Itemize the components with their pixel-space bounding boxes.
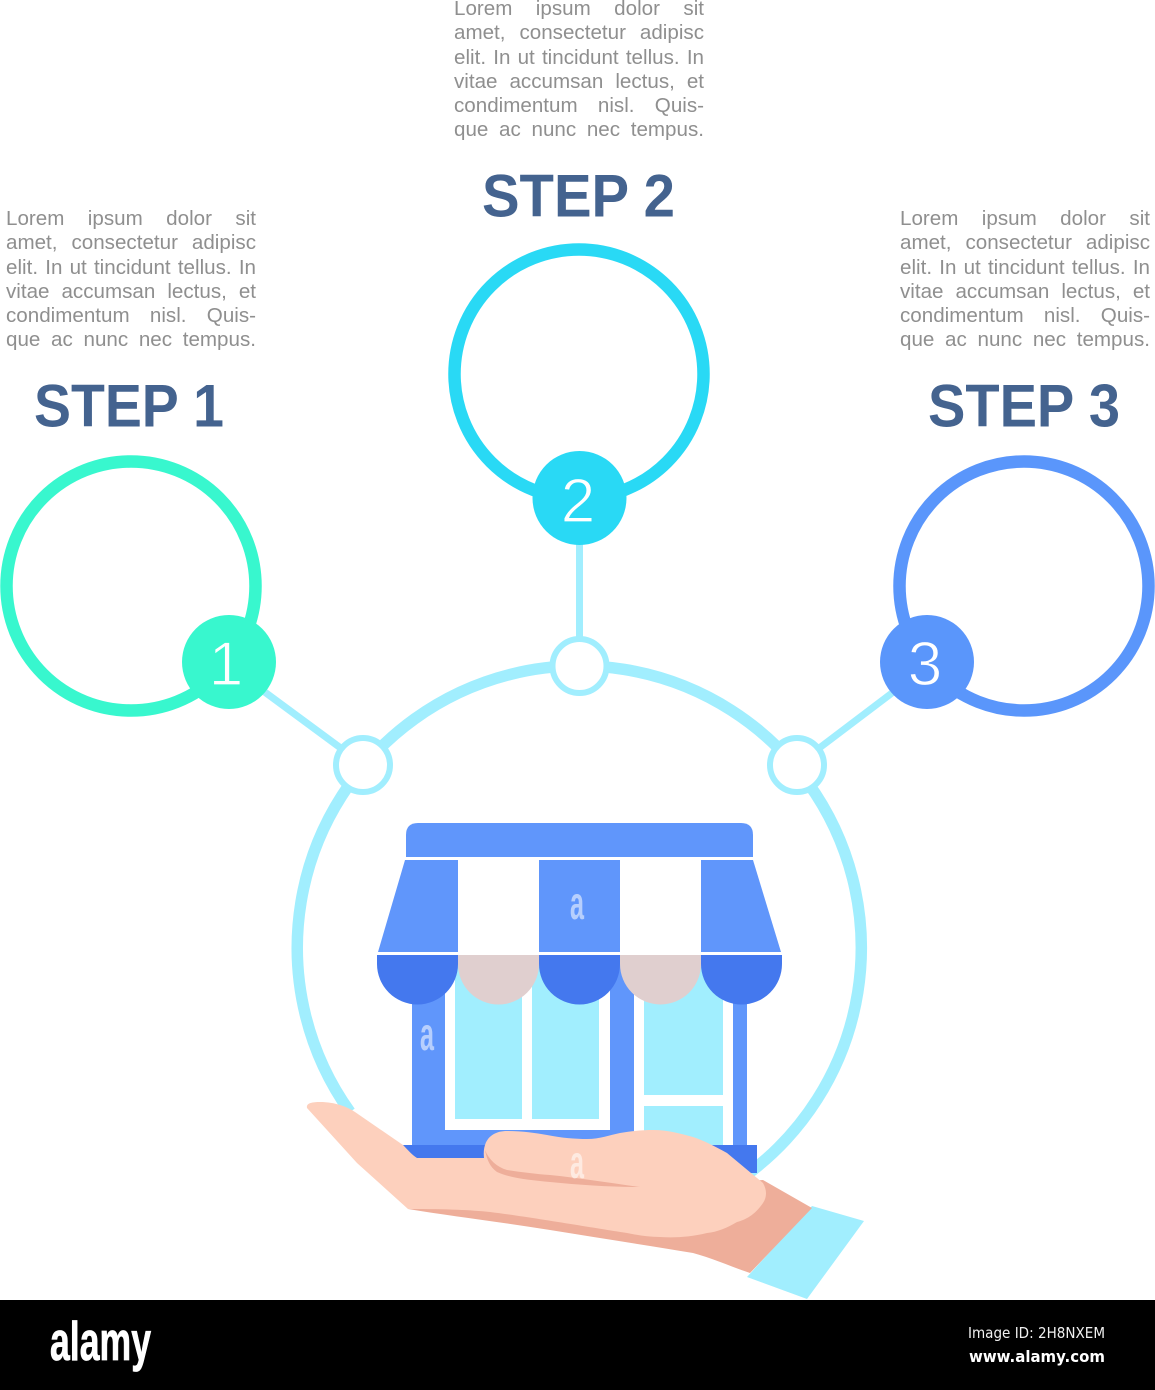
step 2 ring with badge [454, 250, 704, 545]
text block: step 1: elit. In ut tincidunt tellus. In [6, 256, 256, 278]
text block: step 3: amet, consectetur adipisc [900, 231, 1150, 254]
heading: step 1: STEP 1 [34, 372, 224, 440]
text block: step 1 [6, 207, 256, 351]
text block: step 3: Lorem ipsum dolor sit [900, 207, 1150, 230]
palm [307, 1102, 766, 1237]
text block: step 2: amet, consectetur adipisc [454, 21, 704, 44]
connector: step 2 [576, 540, 583, 640]
step 3 ring with badge [880, 462, 1148, 710]
text block: step 1: que ac nunc nec tempus. [6, 328, 256, 351]
shop window [445, 958, 610, 1130]
text block: step 3: elit. In ut tincidunt tellus. In [900, 256, 1150, 278]
step 1 ring with badge [6, 462, 276, 710]
heading: step 2: STEP 2 [482, 162, 675, 230]
awning scallops [377, 955, 782, 1004]
connector node 2 [552, 639, 606, 693]
watermark letters [420, 877, 584, 1188]
text block: step 2: que ac nunc nec tempus. [454, 118, 704, 141]
icon: hand holding the store [307, 1102, 864, 1299]
text block: step 3: que ac nunc nec tempus. [900, 328, 1150, 351]
connector node 1 [336, 738, 390, 792]
wrist and hand shadow [408, 1180, 812, 1273]
icon: storefront [377, 823, 782, 1173]
text block: step 2: vitae accumsan lectus, et [454, 70, 704, 93]
store walls [412, 958, 747, 1155]
footer logo: alamy [50, 1310, 151, 1372]
large central ring [297, 666, 861, 1176]
connector node 3 [770, 738, 824, 792]
text block: step 2: condimentum nisl. Quis- [454, 94, 704, 117]
footer image id: Image ID: 2H8NXEM [968, 1324, 1105, 1342]
step 3 ring with badge: 3 [908, 630, 942, 699]
text block: step 1: condimentum nisl. Quis- [6, 304, 256, 327]
watermark letters: a [570, 877, 584, 929]
shop door [634, 958, 733, 1156]
roof bar [406, 823, 753, 857]
text block: step 1: vitae accumsan lectus, et [6, 280, 256, 303]
sleeve cuff [747, 1206, 864, 1299]
text block: step 2 [454, 0, 704, 141]
awning stripes [378, 860, 781, 952]
store base [403, 1145, 757, 1173]
text block: step 3 [900, 207, 1150, 351]
step 2 ring with badge: 2 [561, 467, 595, 536]
footer website: www.alamy.com [969, 1347, 1105, 1366]
connector: step 1 [262, 690, 342, 749]
finger shadow [485, 1150, 640, 1187]
watermark letters: a [420, 1008, 434, 1060]
text block: step 3: vitae accumsan lectus, et [900, 280, 1150, 303]
step 1 ring with badge: 1 [209, 630, 243, 699]
connector: step 3 [818, 690, 896, 749]
watermark letters: a [570, 1136, 584, 1188]
text block: step 1: amet, consectetur adipisc [6, 231, 256, 254]
heading: step 3: STEP 3 [928, 372, 1120, 440]
text block: step 3: condimentum nisl. Quis- [900, 304, 1150, 327]
footer bar [0, 1300, 1155, 1390]
text block: step 1: Lorem ipsum dolor sit [6, 207, 256, 230]
text block: step 2: elit. In ut tincidunt tellus. In [454, 46, 704, 68]
